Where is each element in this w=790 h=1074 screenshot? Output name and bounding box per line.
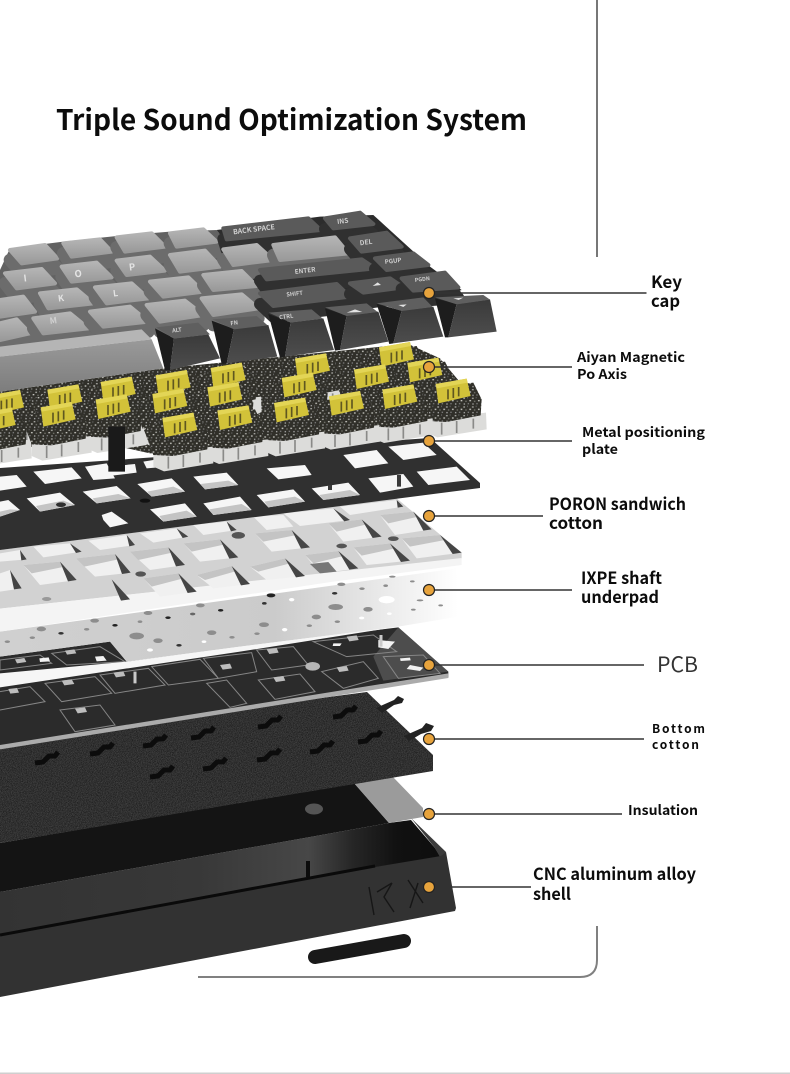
underpad front edge	[0, 627, 398, 687]
callout: key cap: cap	[651, 288, 680, 312]
key legends: ALT	[170, 324, 183, 335]
callout: PCB: PCB	[657, 649, 698, 679]
callout: PCB	[424, 649, 698, 679]
callout: bottom cotton: Bottom	[652, 720, 705, 737]
pcb right sheen	[373, 627, 448, 681]
front row switches	[144, 379, 487, 471]
plate openings	[0, 443, 470, 527]
row 2 keys	[5, 233, 402, 298]
poron cut-out shadows	[10, 500, 462, 601]
callout: metal positioning plate: Metal positioning	[582, 421, 705, 441]
grey keys backing	[0, 230, 263, 347]
underpad holes	[5, 576, 443, 652]
plate body	[0, 438, 480, 550]
stabiliser post	[92, 427, 142, 472]
layer: key caps	[0, 213, 497, 392]
callout: CNC aluminum alloy shell: shell	[533, 881, 571, 905]
row 4 keys	[0, 273, 458, 350]
callout: Aiyan Magnetic Po Axis: Po Axis	[577, 363, 627, 383]
layer: Aiyan magnetic switches	[0, 342, 487, 472]
key legends: PGUP	[384, 255, 402, 266]
callout: PORON sandwich cotton	[424, 491, 686, 534]
callout: Aiyan Magnetic Po Axis: Aiyan Magnetic	[576, 346, 685, 366]
callout: IXPE shaft underpad: IXPE shaft	[581, 565, 662, 589]
callout: IXPE shaft underpad: underpad	[581, 584, 659, 608]
key legends: INS	[336, 215, 349, 226]
pin	[306, 861, 310, 877]
shell rim	[411, 818, 446, 859]
middle row switches	[0, 358, 458, 466]
key legends: ENTER	[294, 264, 317, 276]
key legends: PGDN	[414, 274, 430, 284]
pcb posts	[135, 635, 381, 683]
switch cluster backing	[0, 344, 475, 453]
layer: IXPE shaft underpad	[0, 568, 458, 687]
key legends: I	[23, 270, 27, 285]
black sheet	[0, 783, 389, 892]
poron surface	[0, 498, 462, 609]
layer: metal positioning plate	[0, 438, 480, 550]
poron front edge	[0, 558, 462, 632]
key legends	[23, 215, 430, 335]
poron small holes	[42, 532, 399, 601]
poron seen-through insert	[310, 562, 337, 573]
callout: insulation	[424, 799, 698, 820]
callout: key cap	[424, 269, 683, 312]
callout: metal positioning plate	[424, 421, 705, 458]
bottom row dark caps	[155, 295, 497, 370]
plate posts	[330, 475, 399, 490]
title: Triple Sound Optimization System	[56, 98, 527, 139]
key legends: SHIFT	[286, 288, 304, 299]
underpad surface	[0, 568, 458, 662]
groove	[0, 866, 375, 935]
layer: PCB	[0, 627, 448, 749]
back row switches	[0, 342, 430, 449]
callout: bottom cotton	[424, 720, 705, 753]
key legends: M	[49, 314, 58, 327]
pcb pads	[8, 635, 359, 713]
frame line: bottom right corner	[198, 926, 597, 977]
callout: CNC aluminum alloy shell	[424, 861, 697, 905]
row 3 keys	[0, 253, 428, 327]
pcb traces	[0, 635, 440, 732]
callout: IXPE shaft underpad	[424, 565, 662, 608]
callout: insulation: Insulation	[628, 799, 698, 819]
key legends: BACK SPACE	[232, 222, 275, 237]
rubber foot	[315, 941, 404, 957]
poron cut-outs	[0, 500, 462, 597]
callout: key cap: Key	[651, 269, 683, 293]
logo mark	[369, 880, 423, 915]
pcb round pad	[305, 662, 320, 671]
key legends: DEL	[359, 236, 373, 247]
cotton cut-outs	[35, 706, 381, 777]
shell front face	[0, 852, 456, 997]
space bar	[0, 329, 163, 392]
dark keys backing	[217, 215, 462, 313]
pcb white openings	[39, 640, 423, 671]
page bottom rule	[0, 1072, 790, 1074]
plate small holes	[56, 502, 66, 507]
row 1 keys	[10, 213, 373, 273]
callout: Aiyan Magnetic Po Axis	[424, 346, 685, 383]
frame line: top right vertical	[596, 0, 598, 257]
callout: metal positioning plate: plate	[582, 438, 618, 458]
plate opening shading	[0, 481, 360, 522]
poron cut-out back walls	[23, 512, 445, 587]
shell inner wall	[0, 820, 441, 940]
layer: PORON sandwich cotton	[0, 498, 462, 632]
key legends: L	[112, 287, 119, 300]
callout: bottom cotton: cotton	[652, 736, 699, 753]
key legends: FN	[230, 317, 238, 327]
pcb front edge	[0, 673, 448, 749]
grey exposed corner	[354, 777, 423, 823]
key legends: CTRL	[278, 311, 294, 321]
arrow glyphs on caps	[347, 282, 463, 313]
cotton sheet	[0, 692, 433, 843]
cotton right edge studs	[376, 696, 434, 741]
layer: CNC aluminum alloy shell	[0, 818, 456, 997]
key legends: P	[128, 259, 136, 274]
sheet hole	[305, 804, 323, 814]
callout: PORON sandwich cotton: PORON sandwich	[549, 491, 686, 515]
pcb board	[0, 627, 448, 748]
key legends: O	[74, 266, 82, 280]
layer: bottom cotton	[0, 692, 434, 843]
callout: CNC aluminum alloy shell: CNC aluminum alloy	[533, 861, 697, 885]
callout: PORON sandwich cotton: cotton	[549, 510, 603, 534]
layer: insulation	[0, 777, 423, 892]
key legends: K	[57, 292, 65, 305]
